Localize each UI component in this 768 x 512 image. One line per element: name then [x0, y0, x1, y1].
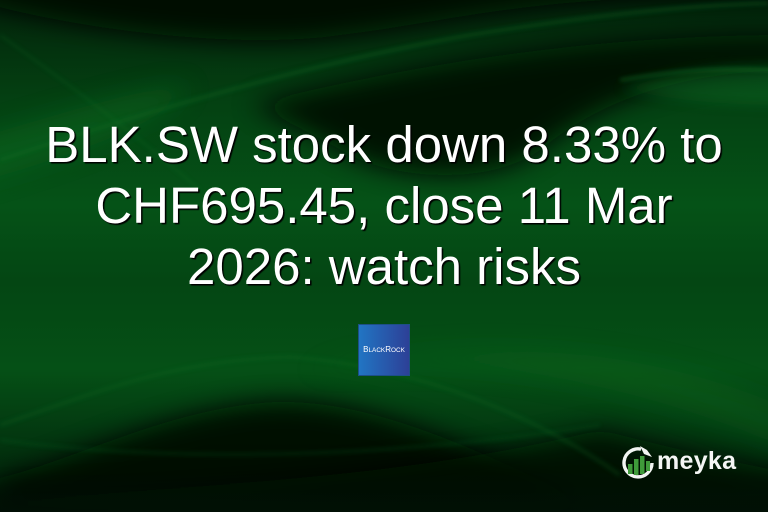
wordmark: meyka — [657, 447, 736, 475]
bottom dark blob — [0, 402, 590, 512]
text: 2026: watch risks — [187, 238, 581, 295]
text: CHF695.45, close 11 Mar — [95, 177, 673, 234]
top dark blob — [250, 35, 768, 175]
soft strokes — [0, 3, 768, 160]
lower glow — [300, 350, 768, 450]
icon: meyka ring with bars — [622, 446, 654, 479]
icon: BlackRock logo: BLACKROCK — [363, 345, 405, 354]
icon: BlackRock logo — [358, 324, 410, 376]
bottom fade — [0, 470, 768, 512]
logo: meyka — [622, 446, 736, 479]
title — [45, 116, 723, 295]
bright right glow — [620, 68, 768, 105]
bright left band — [0, 85, 190, 185]
bottom edge — [0, 430, 768, 512]
text: BLK.SW stock down 8.33% to — [45, 116, 723, 173]
top dark band — [0, 0, 768, 40]
